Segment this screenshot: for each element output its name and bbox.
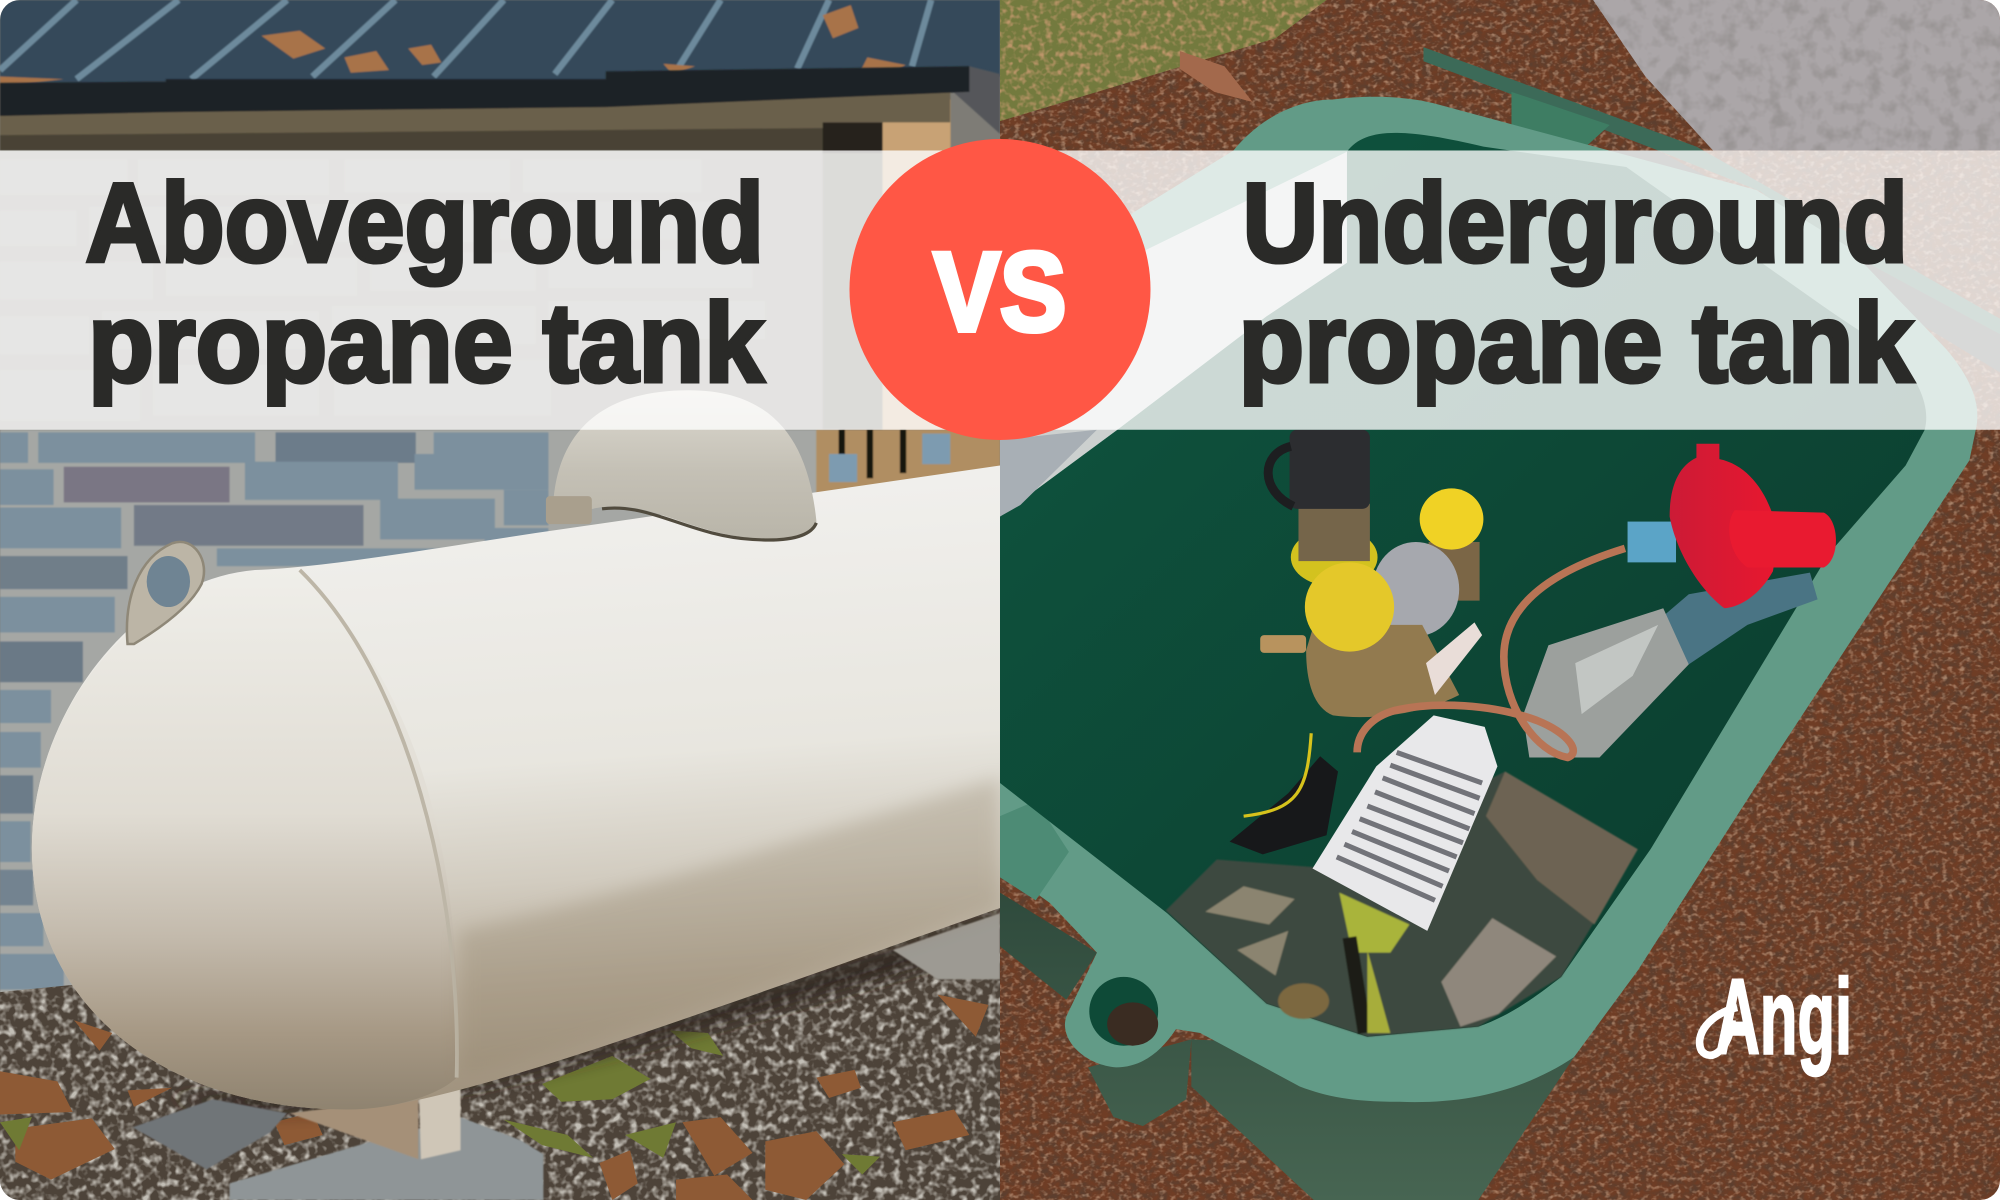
heading: aboveground propane tank: propane tank: [88, 279, 765, 405]
lifting lug hole: [147, 556, 190, 607]
rocks: [1593, 0, 2000, 150]
box outer wall: [1000, 893, 1574, 1200]
heading: aboveground propane tank: Aboveground: [85, 159, 764, 285]
vs badge: [849, 139, 1151, 440]
gravel ground with leaves: [0, 893, 1000, 1200]
silver gauge: [1372, 542, 1459, 636]
red regulator: [1628, 444, 1836, 608]
Angi logo: Angi: [1716, 956, 1852, 1076]
box interior: [1000, 133, 1926, 1037]
tank support leg: [290, 1090, 462, 1160]
fence post and shadow behind title: [823, 99, 950, 430]
lug hole: [1089, 977, 1158, 1046]
red lever: [1426, 622, 1482, 695]
brass body: [1306, 625, 1459, 717]
grey wrapped pipe: [1523, 573, 1818, 757]
stone wall: [0, 430, 842, 997]
translucent title band: [0, 150, 2000, 430]
heading: underground propane tank: Underground: [1242, 159, 1908, 285]
grass patch: [1000, 0, 1332, 128]
label strip on box wall: [1000, 152, 1347, 516]
painted brick wall behind title: [0, 159, 765, 421]
box floor: [1166, 772, 1638, 1037]
fallen leaf: [1180, 51, 1253, 102]
propane tank body: [32, 465, 1000, 1109]
instruction paper: [1312, 715, 1497, 931]
right photo: underground tank: [1000, 0, 2000, 1200]
big yellow cap: [1305, 562, 1394, 652]
lifting lug: [127, 542, 204, 644]
concrete blocks: [133, 913, 1000, 1200]
tank shadow: [166, 908, 1000, 1110]
box lid: [1423, 47, 2000, 372]
copper pipe: [1357, 548, 1625, 757]
Angi logo: [1700, 956, 1852, 1076]
relief fitting: [1260, 635, 1306, 653]
valve with black cap: [1268, 430, 1378, 587]
gutter and soffit: [0, 66, 1000, 153]
heading: underground propane tank: [1239, 159, 1914, 405]
heading: underground propane tank: propane tank: [1239, 279, 1914, 405]
box rim clamp: [1000, 801, 1069, 900]
black boot: [1230, 756, 1338, 854]
roof with metal panels: [0, 0, 1000, 87]
small yellow cap valve: [1420, 488, 1483, 601]
valve dome: [546, 390, 816, 540]
box rim: [1000, 97, 1977, 1102]
fence and wood beyond tank: [816, 430, 1000, 494]
yellow wire: [1244, 733, 1311, 816]
vs badge: VS: [934, 228, 1066, 354]
heading: aboveground propane tank: [85, 159, 765, 405]
left photo: aboveground tank: [0, 0, 1000, 1200]
